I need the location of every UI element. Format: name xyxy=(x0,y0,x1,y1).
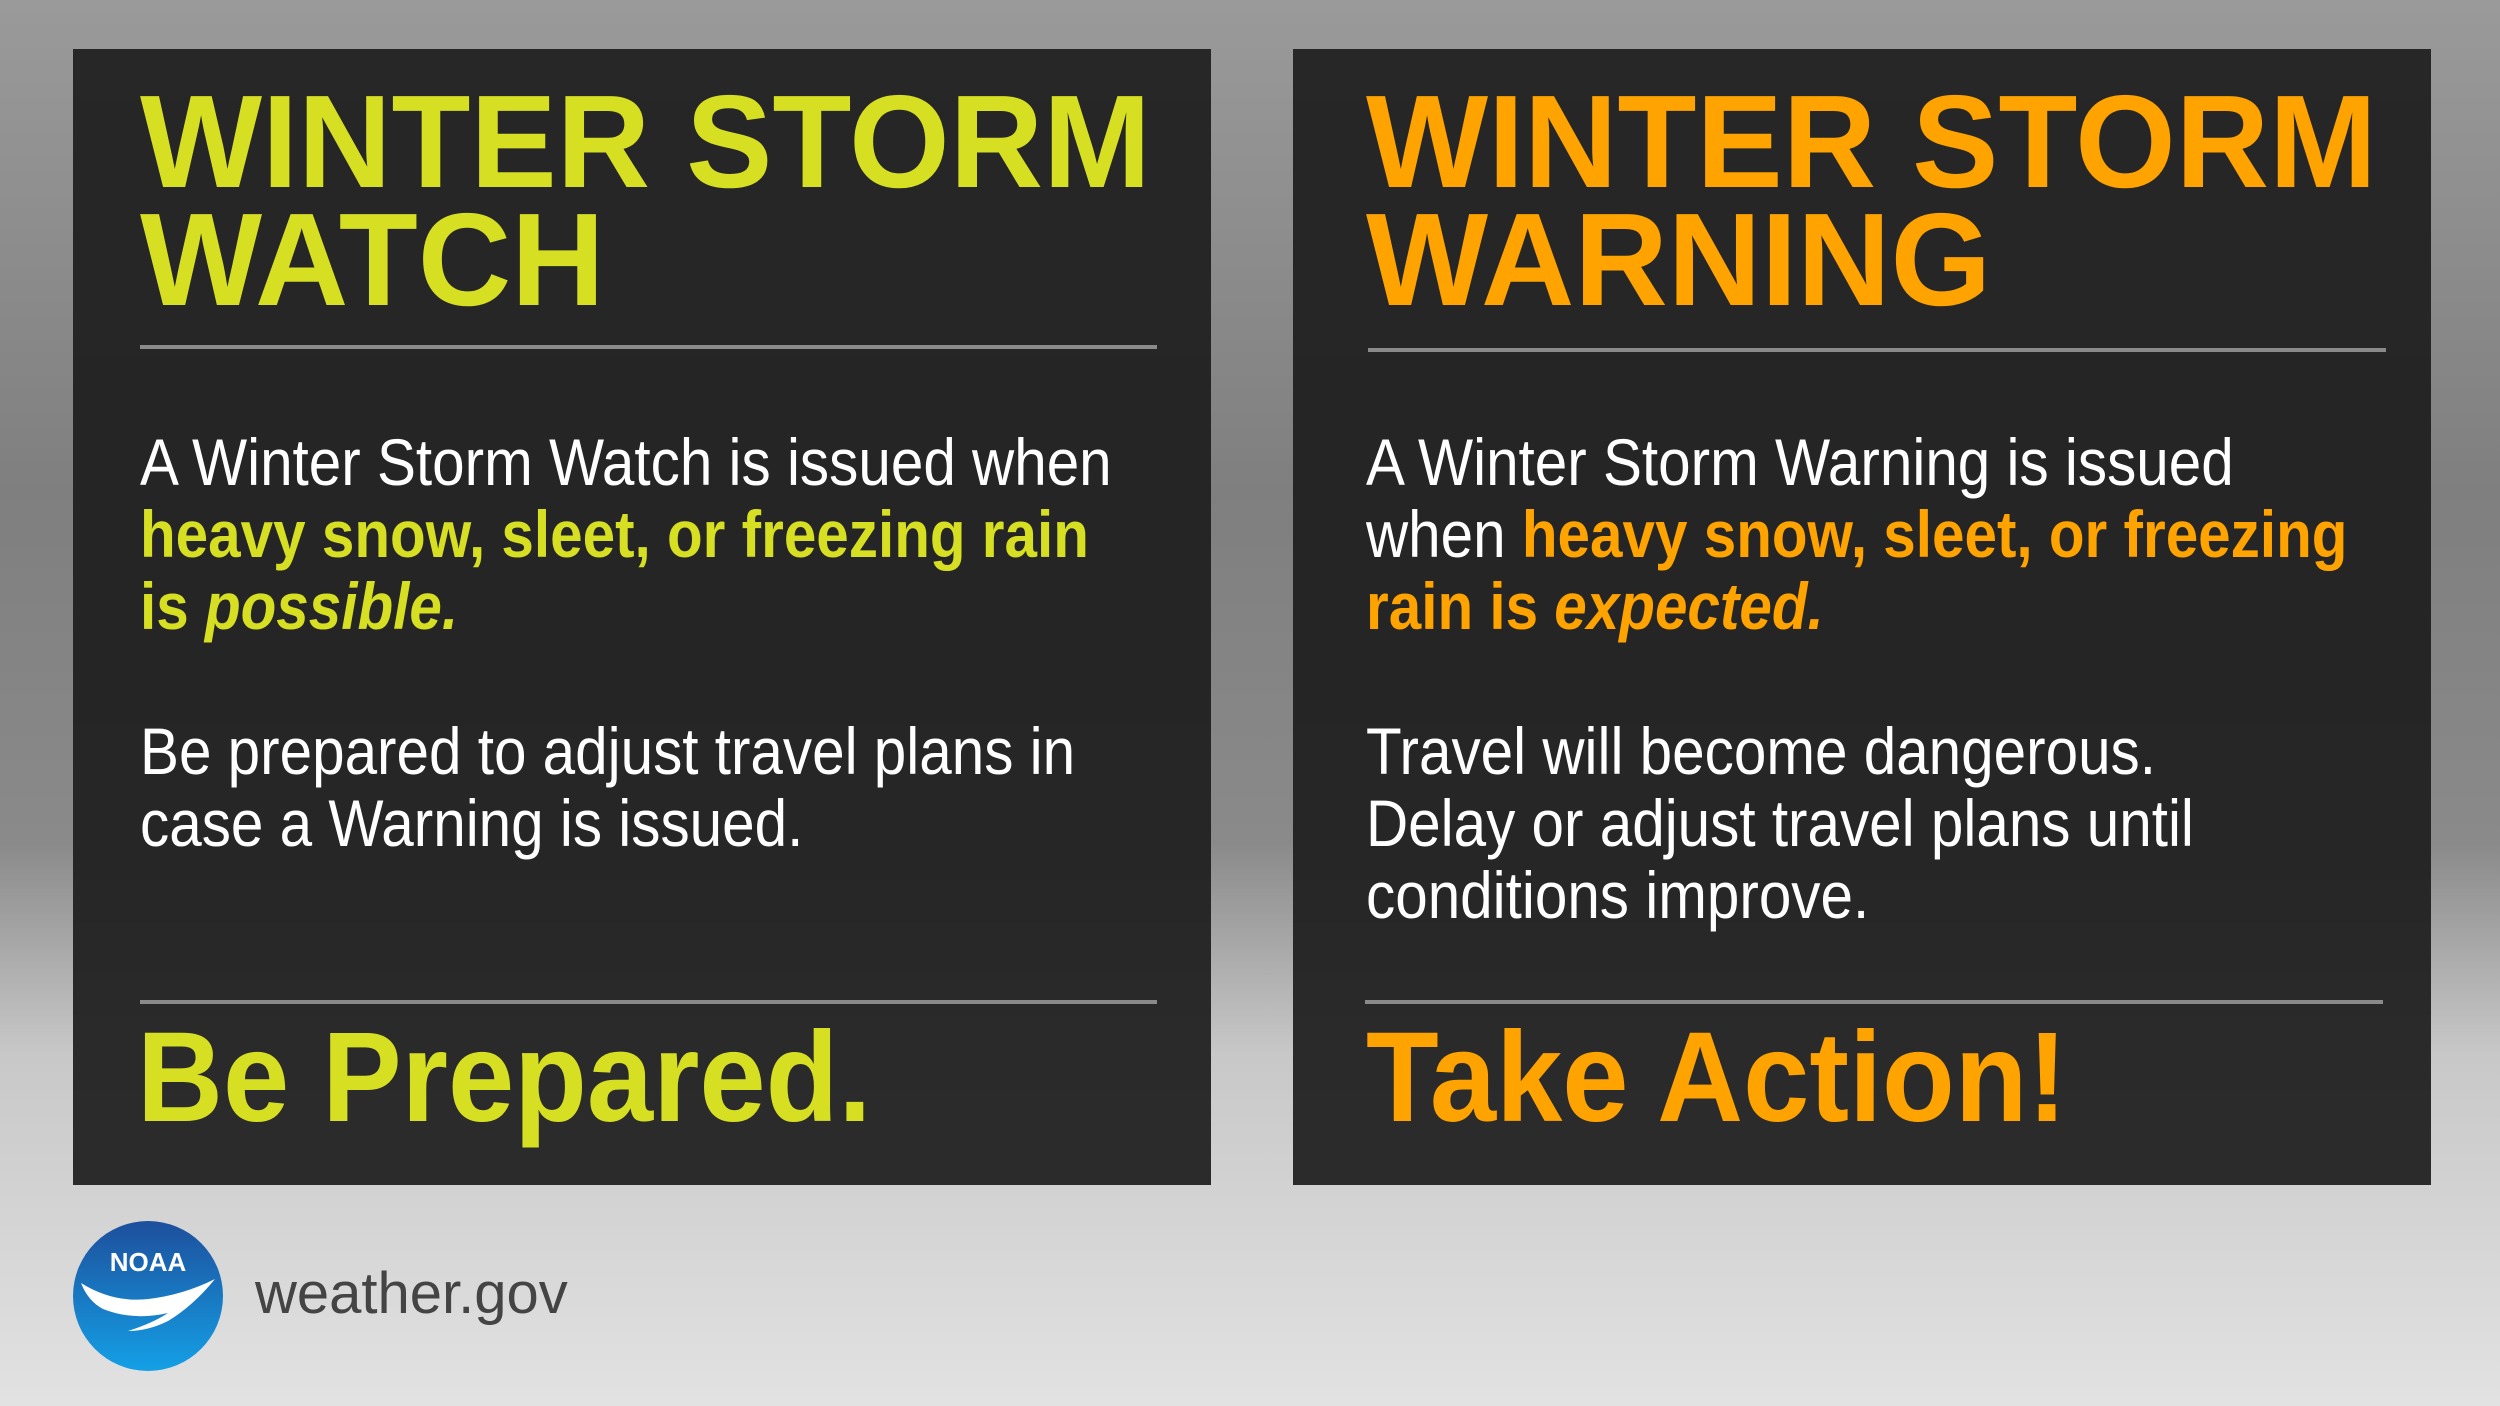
warning advice: conditions improve. xyxy=(1366,858,1869,932)
icon: NOAA logo xyxy=(73,1221,223,1371)
watch description: heavy snow, sleet, or freezing rain xyxy=(140,497,1089,571)
watch slogan: Be Prepared. xyxy=(137,1006,871,1149)
panel: winter storm warning xyxy=(1293,49,2431,1185)
warning slogan: Take Action! xyxy=(1366,1006,2067,1149)
watch description: is possible. xyxy=(140,569,458,643)
website text: weather.gov xyxy=(255,1261,568,1326)
watch advice: Be prepared to adjust travel plans in xyxy=(140,714,1075,788)
watch advice xyxy=(140,714,1075,860)
warning title: WINTER STORM xyxy=(1366,68,2377,215)
warning description: when heavy snow, sleet, or freezing xyxy=(1366,497,2347,571)
icon: NOAA logo: NOAA xyxy=(110,1247,186,1277)
watch description: A Winter Storm Watch is issued when xyxy=(140,425,1112,499)
warning description: rain is expected. xyxy=(1366,569,1824,643)
warning advice: Delay or adjust travel plans until xyxy=(1366,786,2194,860)
warning advice: Travel will become dangerous. xyxy=(1366,714,2156,788)
watch title xyxy=(140,68,1151,333)
warning description xyxy=(1366,425,2347,643)
panel: winter storm watch xyxy=(73,49,1211,1185)
watch title: WATCH xyxy=(140,186,605,333)
warning title xyxy=(1366,68,2377,333)
watch description xyxy=(140,425,1112,643)
warning title: WARNING xyxy=(1366,186,1991,333)
warning description: A Winter Storm Warning is issued xyxy=(1366,425,2234,499)
watch title: WINTER STORM xyxy=(140,68,1151,215)
warning advice xyxy=(1366,714,2194,932)
watch advice: case a Warning is issued. xyxy=(140,786,803,860)
